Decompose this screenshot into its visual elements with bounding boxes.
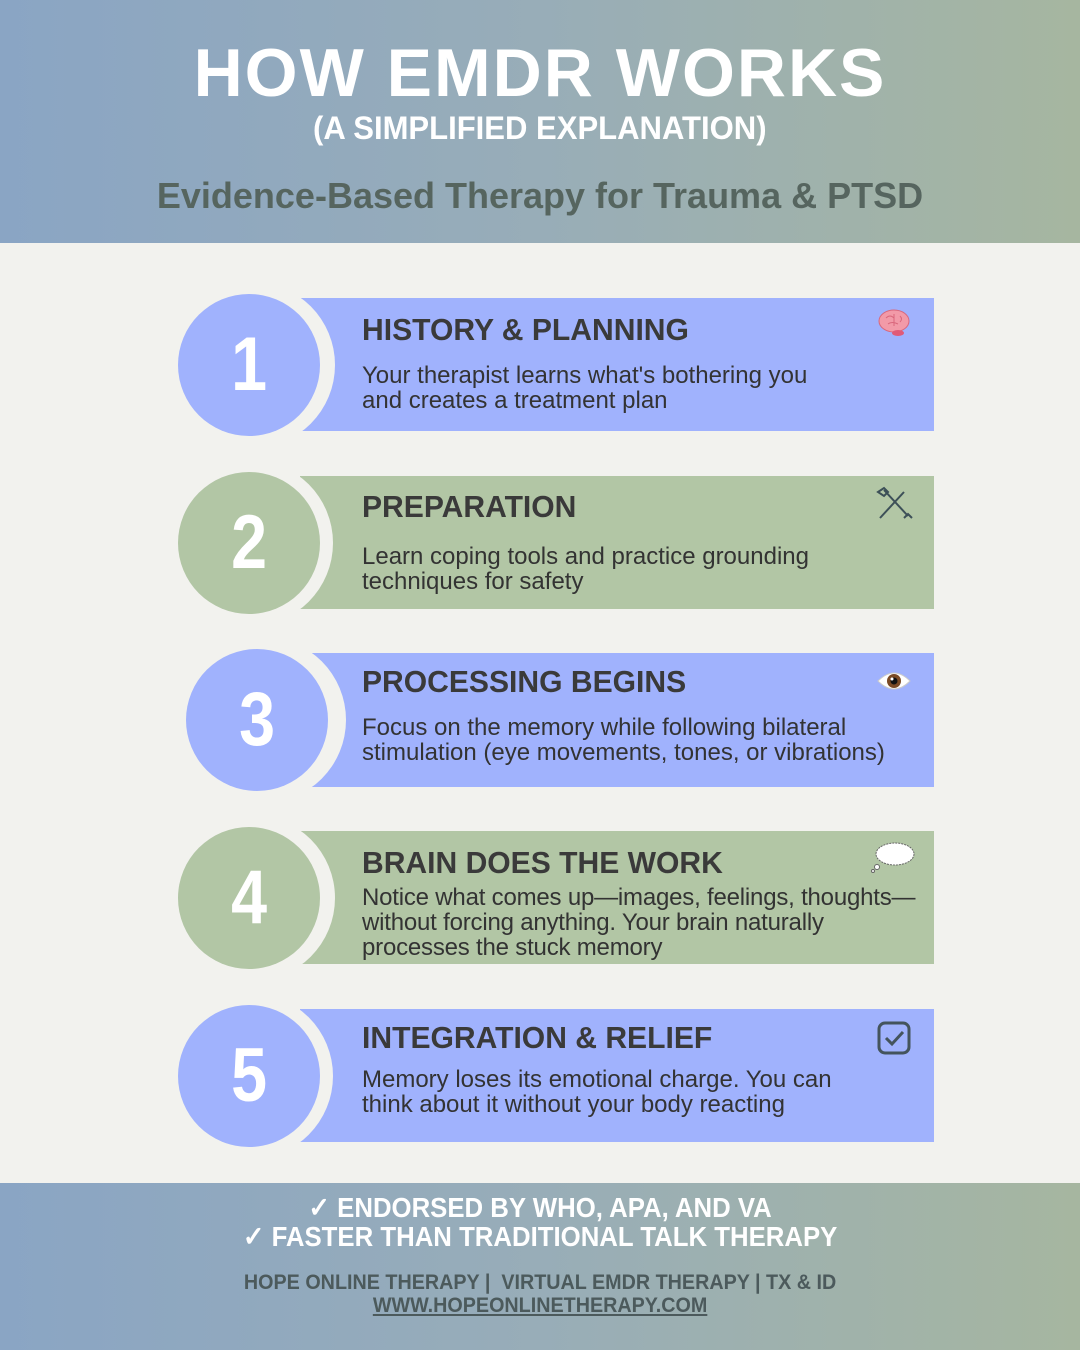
step 2 title: PREPARATION (362, 489, 576, 524)
contact info: HOPE ONLINE THERAPY | VIRTUAL EMDR THERAPY | TX & ID (244, 1271, 836, 1294)
step 3 card (300, 653, 934, 787)
step 4 number (178, 827, 320, 969)
step 5 card (300, 1009, 934, 1142)
icon: tools (876, 486, 913, 519)
step 3 number (186, 649, 328, 791)
step 1 body: and creates a treatment plan (362, 387, 668, 414)
contact info (244, 1271, 836, 1317)
endorsements (243, 1192, 837, 1252)
step 5 body: think about it without your body reacting (362, 1091, 785, 1118)
step 4 title: BRAIN DOES THE WORK (362, 845, 723, 880)
step 1 body: Your therapist learns what's bothering you (362, 362, 807, 389)
step 2 body: Learn coping tools and practice grounding (362, 543, 809, 570)
step 4 body (362, 884, 916, 961)
icon: eye (878, 672, 910, 690)
step 5 title: INTEGRATION & RELIEF (362, 1020, 712, 1055)
icon: brain (878, 310, 910, 336)
step 5 body: Memory loses its emotional charge. You can (362, 1066, 832, 1093)
step 2 card (300, 476, 934, 609)
step 1 number (178, 294, 320, 436)
step 2 body (362, 543, 809, 595)
step 3 number: 3 (239, 677, 275, 762)
footer banner (0, 1183, 1080, 1350)
title: HOW EMDR WORKS (194, 35, 886, 111)
step 5 body (362, 1066, 832, 1118)
step 3 body (362, 714, 885, 766)
step 4 body: Notice what comes up—images, feelings, thoughts— (362, 884, 915, 911)
header banner (0, 0, 1080, 243)
subtitle: (A SIMPLIFIED EXPLANATION) (313, 110, 767, 146)
step 1 card (300, 298, 934, 431)
contact info: WWW.HOPEONLINETHERAPY.COM (373, 1294, 707, 1317)
step 3 title: PROCESSING BEGINS (362, 664, 686, 699)
step 3 body: Focus on the memory while following bilateral (362, 714, 846, 741)
endorsements: ✓ FASTER THAN TRADITIONAL TALK THERAPY (243, 1221, 837, 1252)
step 4 body: processes the stuck memory (362, 934, 662, 961)
step 2 number (178, 472, 320, 614)
step 4 number: 4 (231, 855, 267, 940)
step 4 body: without forcing anything. Your brain naturally (362, 909, 824, 936)
step 4 card (300, 831, 934, 964)
step 2 body: techniques for safety (362, 568, 583, 595)
step 5 number: 5 (231, 1033, 267, 1118)
step 2 number: 2 (231, 500, 267, 585)
step 3 body: stimulation (eye movements, tones, or vibrations) (362, 739, 885, 766)
step 1 title: HISTORY & PLANNING (362, 312, 689, 347)
icon: thought bubble (871, 842, 914, 873)
step 5 number (178, 1005, 320, 1147)
step 1 body (362, 362, 807, 414)
icon: checkbox (878, 1022, 910, 1054)
tagline: Evidence-Based Therapy for Trauma & PTSD (157, 175, 923, 216)
step 1 number: 1 (231, 322, 267, 407)
endorsements: ✓ ENDORSED BY WHO, APA, AND VA (308, 1192, 772, 1223)
